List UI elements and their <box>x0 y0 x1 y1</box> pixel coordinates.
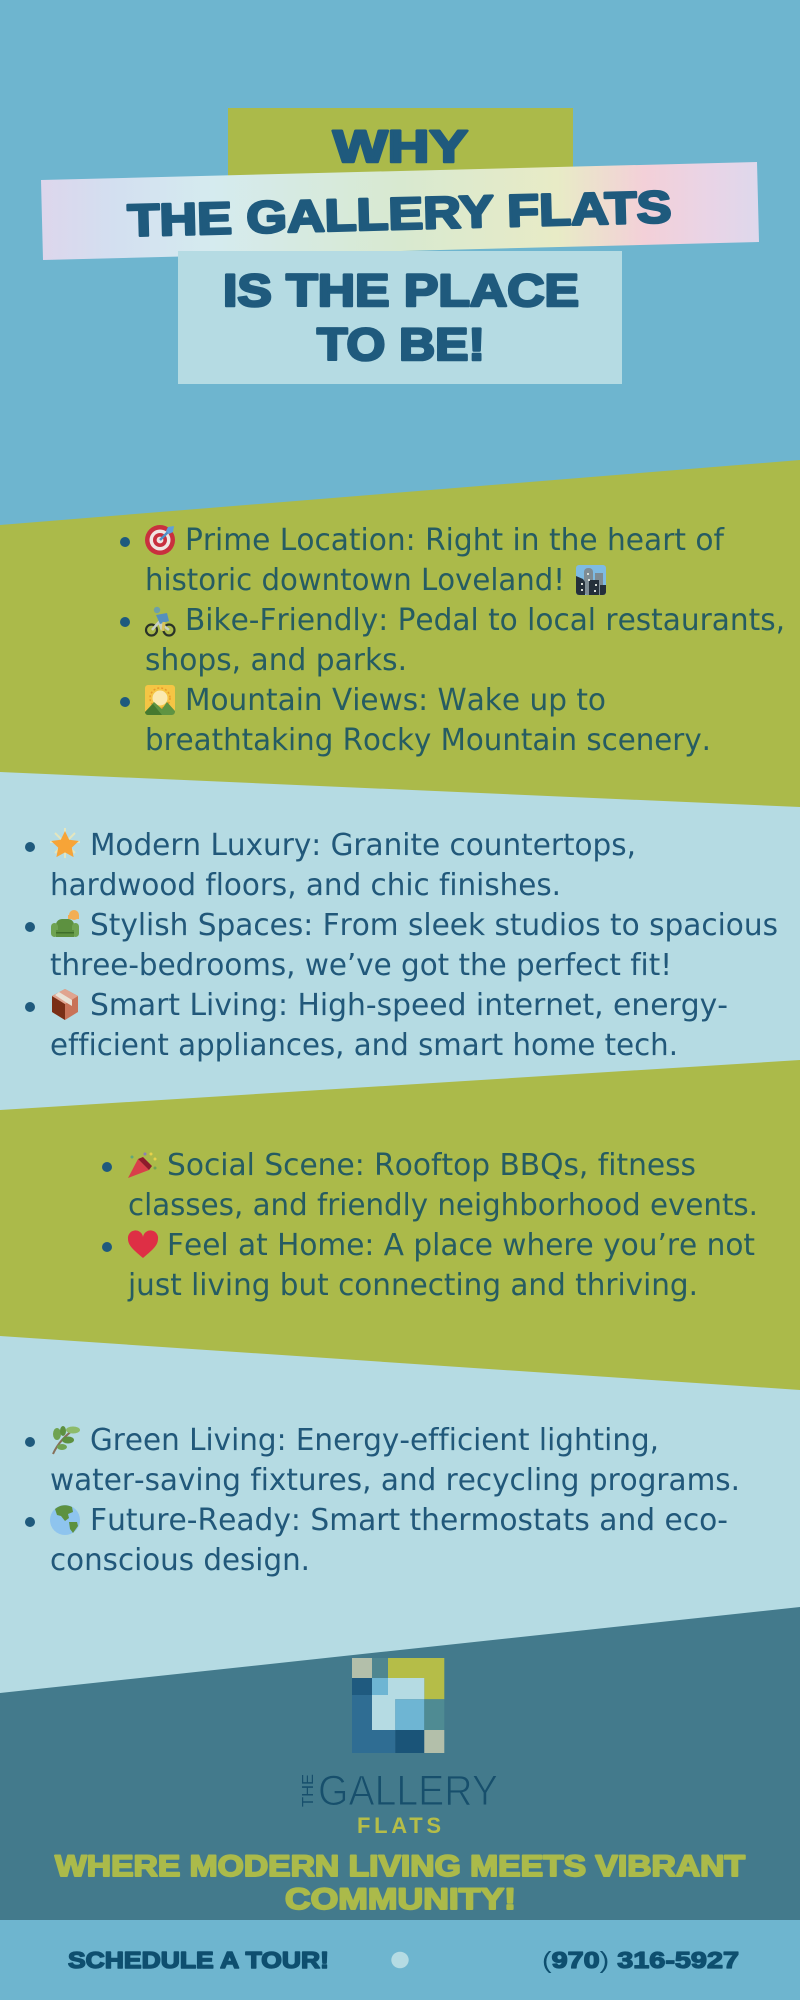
icon: mountain sunrise <box>145 685 175 715</box>
icon: package <box>52 989 78 1020</box>
icon: glowing star <box>50 828 80 858</box>
text: water saving: water-saving fixtures, and recycling programs. <box>50 1463 740 1498</box>
title line: The Gallery Flats: THE GALLERY FLATS <box>127 181 672 246</box>
tagline: WHERE MODERN LIVING MEETS VIBRANT <box>55 1850 745 1883</box>
icon: cityscape <box>576 565 606 595</box>
text: breathtaking: breathtaking Rocky Mountain scenery. <box>145 723 711 758</box>
logo mark <box>352 1658 444 1753</box>
panel: luxury <box>25 828 778 1063</box>
text: hardwood: hardwood floors, and chic finishes. <box>50 868 561 903</box>
tagline <box>55 1850 745 1916</box>
text: green living: Green Living: Energy-efficient lighting, <box>90 1423 659 1458</box>
text: conscious: conscious design. <box>50 1543 310 1578</box>
title box: olive <box>228 108 573 180</box>
text: just living: just living but connecting and thriving. <box>127 1268 698 1303</box>
logo text: GALLERY: GALLERY <box>318 1767 498 1815</box>
tagline: COMMUNITY! <box>285 1883 516 1916</box>
band: teal <box>0 1607 800 1920</box>
title ribbon <box>41 162 759 260</box>
logo text: FLATS: FLATS <box>357 1813 441 1838</box>
bullet markers <box>120 537 130 707</box>
band: light blue sections background <box>0 760 800 1705</box>
footer <box>0 1920 800 2000</box>
panel: green living <box>25 1423 740 1578</box>
text: bike friendly: Bike-Friendly: Pedal to local restaurants, <box>185 603 785 638</box>
title box: pale blue <box>178 251 622 384</box>
bullet markers <box>25 842 35 1012</box>
panel: closing <box>0 1607 800 1920</box>
bullet markers <box>25 1437 35 1527</box>
text: historic downtown: historic downtown Loveland! <box>145 563 565 598</box>
title line: is the place: IS THE PLACE <box>223 265 579 316</box>
icon: cyclist <box>146 607 174 636</box>
text: classes: classes, and friendly neighborhood events. <box>128 1188 758 1223</box>
title line: to be: TO BE! <box>317 319 485 370</box>
icon: target <box>145 525 175 555</box>
icon: herb <box>53 1426 80 1454</box>
title word: WHY: WHY <box>333 121 468 172</box>
text: shops and parks: shops, and parks. <box>145 643 407 678</box>
panel: community <box>0 1060 800 1390</box>
text: three bedrooms: three-bedrooms, we’ve got the perfect fit! <box>50 948 672 983</box>
text: efficient: efficient appliances, and smart home tech. <box>50 1028 678 1063</box>
text: phone: (970 ) 316-5927 <box>542 1947 739 1973</box>
icon: couch and lamp <box>51 910 79 937</box>
text: schedule a tour: SCHEDULE A TOUR! <box>68 1947 329 1973</box>
text: mountain views: Mountain Views: Wake up to <box>185 683 606 718</box>
text: stylish spaces: Stylish Spaces: From sleek studios to spacious <box>90 908 778 943</box>
icon: heart <box>128 1230 158 1258</box>
text: future ready: Future-Ready: Smart thermostats and eco- <box>90 1503 728 1538</box>
footer dot <box>391 1952 409 1968</box>
text: social scene: Social Scene: Rooftop BBQs, fitness <box>167 1148 696 1183</box>
panel: location <box>0 460 800 807</box>
text: modern luxury: Modern Luxury: Granite countertops, <box>90 828 636 863</box>
icon: earth <box>50 1505 80 1535</box>
band: olive two <box>0 1060 800 1390</box>
band: olive one <box>0 460 800 807</box>
text: feel at home: Feel at Home: A place where you’re not <box>167 1228 755 1263</box>
text: smart living: Smart Living: High-speed internet, energy- <box>90 988 728 1023</box>
title block <box>41 108 759 384</box>
logo text: THE: THE <box>300 1774 317 1807</box>
bullet markers <box>102 1162 112 1252</box>
icon: party popper <box>128 1152 156 1178</box>
footer band <box>0 1920 800 2000</box>
text: prime location: Prime Location: Right in the heart of <box>185 523 725 558</box>
